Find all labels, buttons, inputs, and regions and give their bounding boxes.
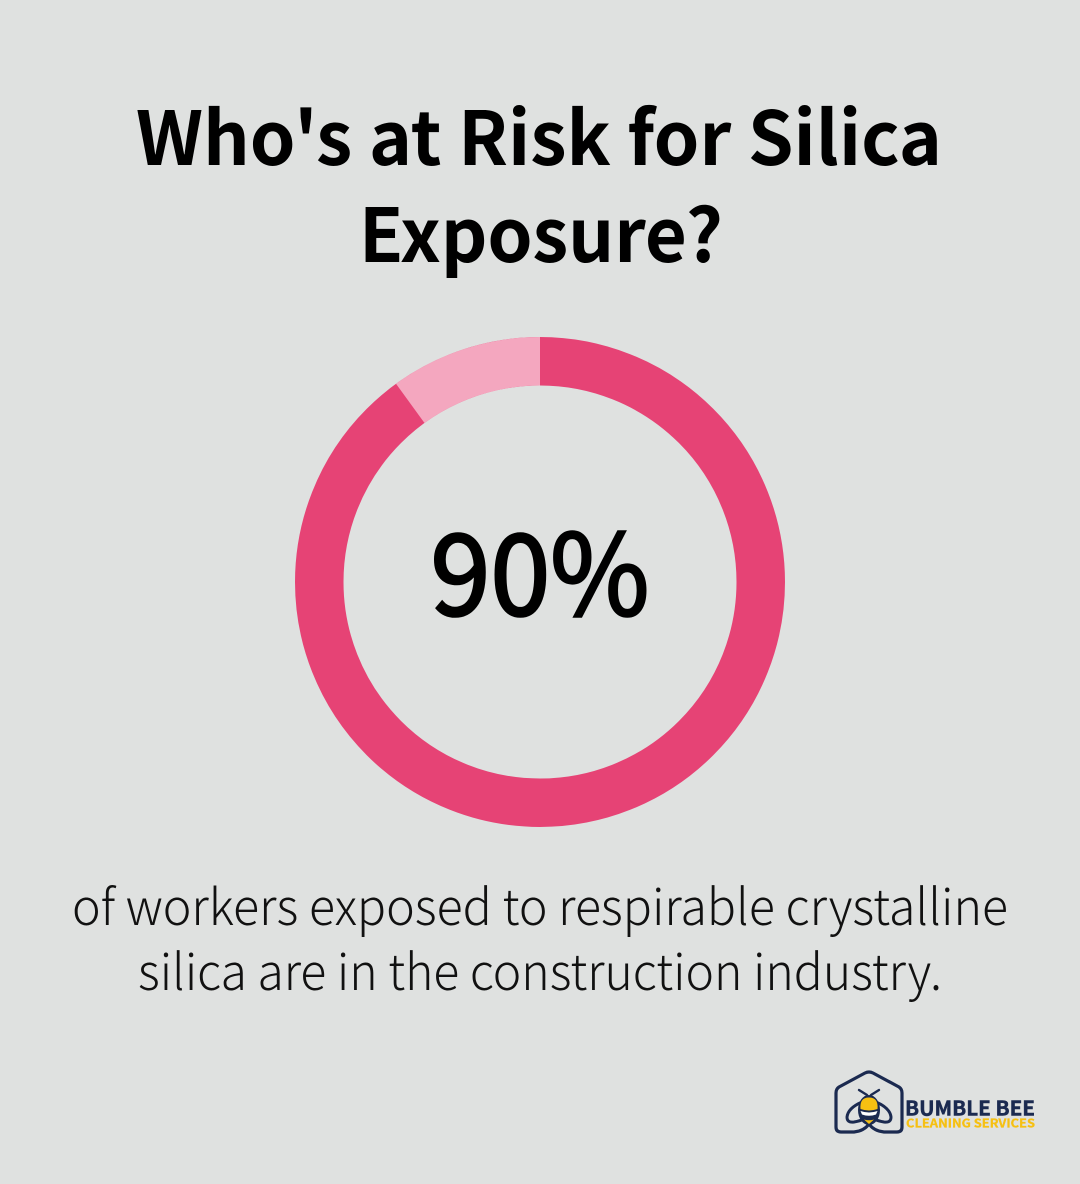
big number: 90% — [430, 486, 650, 648]
donut chart: 90% — [319, 361, 761, 803]
logo wordmark: BUMBLE BEE — [905, 1092, 1035, 1122]
logo tagline: CLEANING SERVICES — [906, 1114, 1035, 1132]
logo: Bumble Bee Cleaning Services — [836, 1072, 1035, 1132]
title: Exposure? — [359, 177, 723, 284]
title — [136, 80, 942, 284]
description text: of workers exposed to respirable crystalline — [72, 868, 1008, 940]
remaining 10% segment — [410, 361, 540, 403]
icon: house with bee — [836, 1072, 902, 1132]
title: Who's at Risk for Silica — [136, 80, 942, 187]
description text — [72, 868, 1008, 1005]
description text: silica are in the construction industry. — [138, 933, 942, 1005]
